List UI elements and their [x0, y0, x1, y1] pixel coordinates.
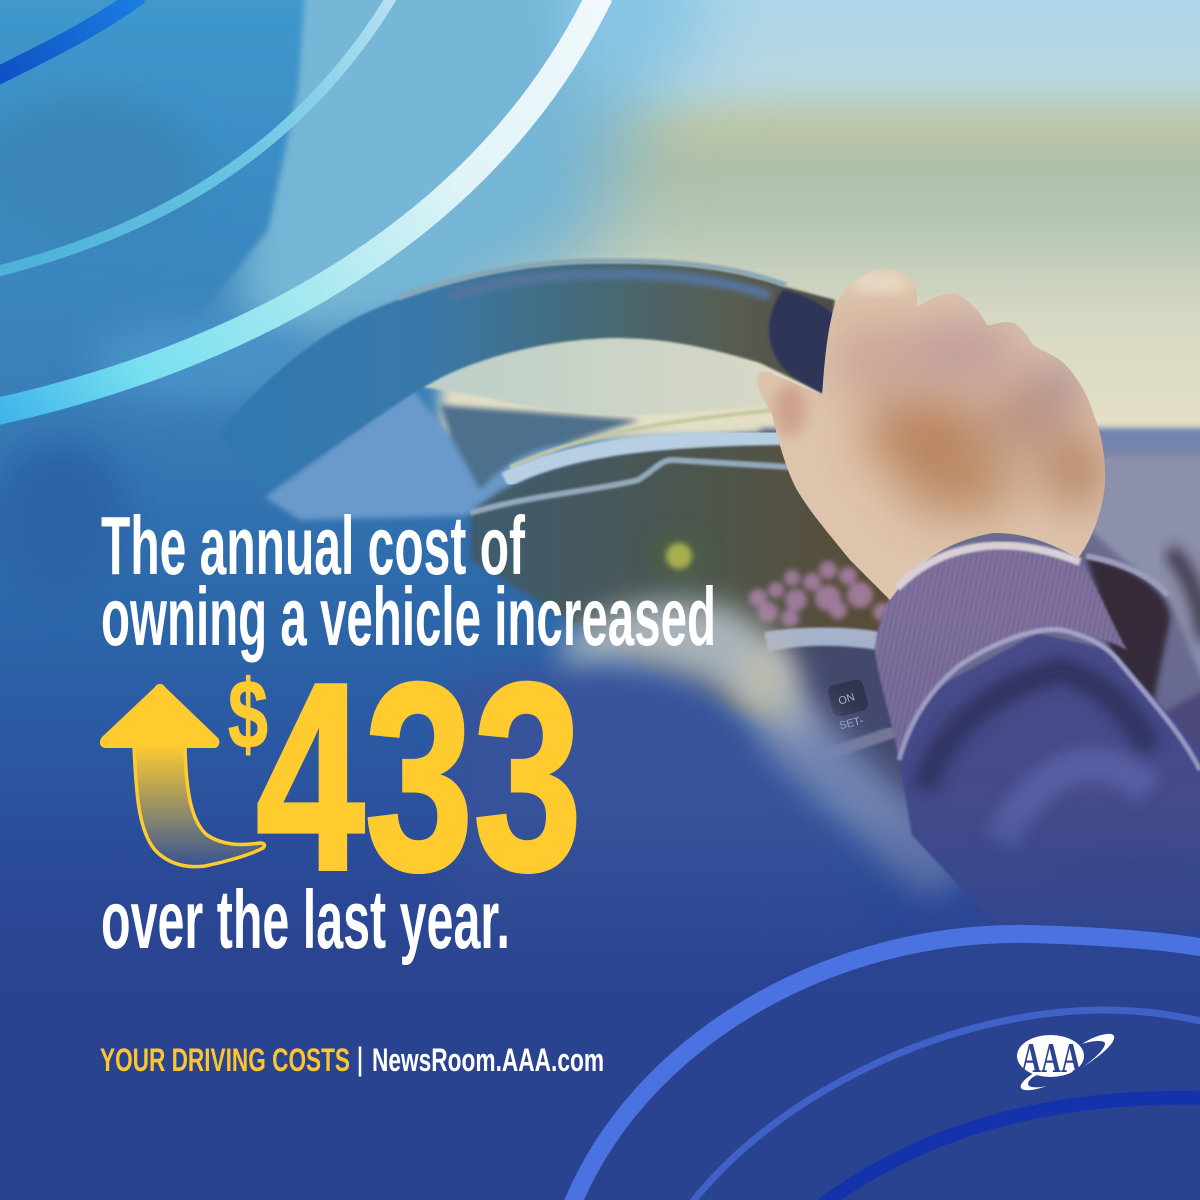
- wheel grip: [769, 290, 838, 395]
- logo: AAA: AAA: [1021, 1036, 1081, 1082]
- steering wheel: [219, 263, 835, 490]
- blurred near hand: [450, 601, 930, 980]
- headline: [101, 499, 716, 663]
- hand: [757, 269, 1106, 600]
- dashboard top right: [1090, 455, 1200, 700]
- far dashboard band: [760, 428, 1200, 462]
- footer source line: [100, 1041, 604, 1078]
- sleeve folds: [925, 670, 1200, 880]
- arc: thin: [690, 1010, 1200, 1200]
- footer source line: NewsRoom.AAA.com: [372, 1042, 604, 1078]
- wheel upper rim: [398, 261, 786, 298]
- sleeve: [899, 633, 1200, 930]
- arc: wide periwinkle: [572, 934, 1200, 1200]
- closing line: over the last year.: [101, 873, 510, 966]
- cluster rims: [510, 410, 775, 467]
- icon: rising arrow: [100, 684, 264, 867]
- footer source line: YOUR DRIVING COSTS: [100, 1042, 350, 1078]
- sleeve cuff: [875, 546, 1127, 760]
- button labelled ON: [827, 678, 869, 732]
- dollar amount: $: [228, 660, 268, 769]
- instrument cluster: [470, 430, 900, 760]
- dash arc right: [1085, 555, 1200, 800]
- decorative arcs bottom right: [572, 934, 1200, 1200]
- decorative arcs top left: [0, 0, 600, 412]
- gauge lights: [749, 561, 891, 627]
- steering hub: [765, 640, 905, 850]
- bottom blue fade: [0, 620, 1200, 1000]
- button labelled ON: ON: [837, 691, 856, 708]
- soft left windshield: [240, 0, 640, 340]
- dollar amount: 433: [256, 627, 582, 926]
- dash hood: [423, 338, 775, 415]
- arc: wide light: [0, 0, 600, 412]
- yellow indicator light: [649, 526, 709, 586]
- arc: thin: [0, 0, 393, 272]
- backdrop behind wrist: [880, 445, 1200, 805]
- headline: The annual cost of: [101, 499, 525, 592]
- interior light patches: [0, 100, 310, 600]
- button labelled ON: SET-: [838, 715, 865, 732]
- footer source line: |: [356, 1041, 364, 1077]
- headline: owning a vehicle increased: [101, 570, 716, 663]
- shirt trim: [897, 546, 1080, 588]
- door pillar: [0, 0, 306, 350]
- sleeve edge: [899, 630, 1200, 770]
- lower dash panel: [265, 390, 570, 520]
- arc: deep blue: [822, 1098, 1200, 1200]
- dollar amount: [228, 627, 582, 926]
- arc: dark blue: [0, 0, 140, 77]
- sky through windshield: [440, 0, 1200, 440]
